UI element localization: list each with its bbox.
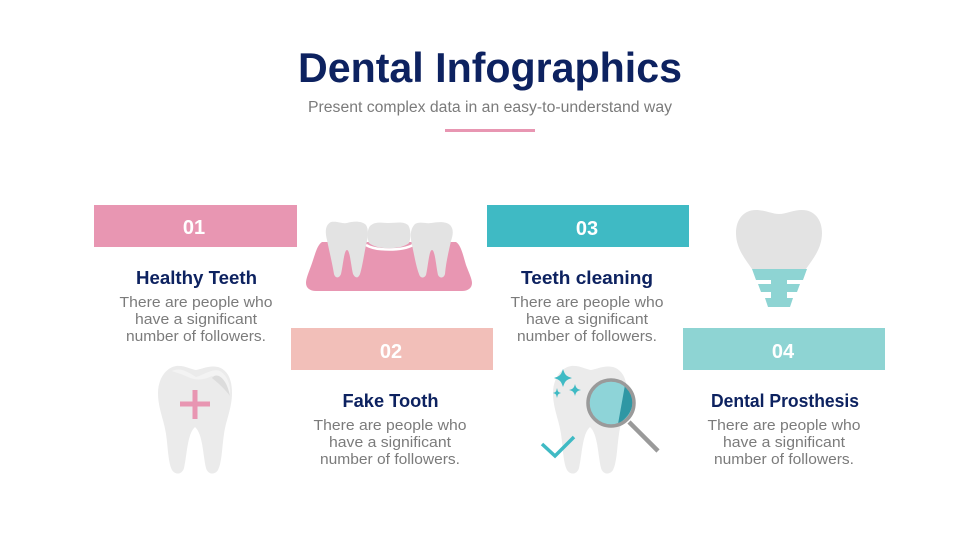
text: Healthy Teeth description: [120, 294, 272, 345]
number bar 02: 02: [380, 341, 402, 363]
icon: tooth with magnifier, sparkles and check: [542, 366, 658, 474]
text: Teeth cleaning description: [510, 294, 664, 345]
number bar 03: [487, 205, 689, 247]
text: Fake Tooth description: [314, 417, 466, 468]
title: Dental Infographics: [298, 44, 682, 91]
number bar 04: [683, 328, 885, 370]
text: Healthy Teeth description: number of followers.: [126, 328, 266, 345]
panel: 03 Teeth cleaning: [487, 205, 689, 345]
icon: sparkles: [553, 369, 581, 398]
number bar 04: 04: [772, 341, 795, 363]
heading: Fake Tooth: Fake Tooth: [342, 391, 438, 411]
icon: magnifier: [588, 380, 658, 451]
text: Dental Prosthesis description: [708, 417, 860, 468]
text: Fake Tooth description: number of followers.: [320, 451, 460, 468]
text: Healthy Teeth description: There are people who: [120, 294, 272, 311]
text: Teeth cleaning description: number of followers.: [517, 328, 657, 345]
text: Fake Tooth description: There are people who: [314, 417, 466, 434]
text: Teeth cleaning description: There are people who: [510, 294, 664, 311]
number bar 01: 01: [183, 217, 205, 239]
text: Dental Prosthesis description: number of followers.: [714, 451, 854, 468]
panel: 04 Dental Prosthesis: [683, 328, 885, 468]
text: Fake Tooth description: have a significant: [329, 434, 452, 451]
icon: check mark: [542, 437, 574, 456]
number bar 03: 03: [576, 218, 598, 240]
panel: 02 Fake Tooth: [291, 328, 493, 468]
icon: dental implant: [736, 210, 822, 307]
text: Teeth cleaning description: have a significant: [526, 311, 649, 328]
text: Dental Prosthesis description: There are people who: [708, 417, 860, 434]
heading: Dental Prosthesis: Dental Prosthesis: [711, 391, 859, 411]
text: Healthy Teeth description: have a significant: [135, 311, 258, 328]
heading: Healthy Teeth: Healthy Teeth: [136, 268, 257, 288]
icon: tooth with plus: [158, 366, 232, 474]
heading: Teeth cleaning: Teeth cleaning: [521, 268, 653, 288]
icon: gums with dental bridge: [306, 222, 472, 291]
subtitle: Present complex data in an easy-to-understand way: [308, 99, 672, 116]
number bar 01: [94, 205, 297, 247]
title underline: [445, 129, 535, 132]
number bar 02: [291, 328, 493, 370]
text: Dental Prosthesis description: have a significant: [723, 434, 846, 451]
panel: 01 Healthy Teeth: [94, 205, 297, 345]
